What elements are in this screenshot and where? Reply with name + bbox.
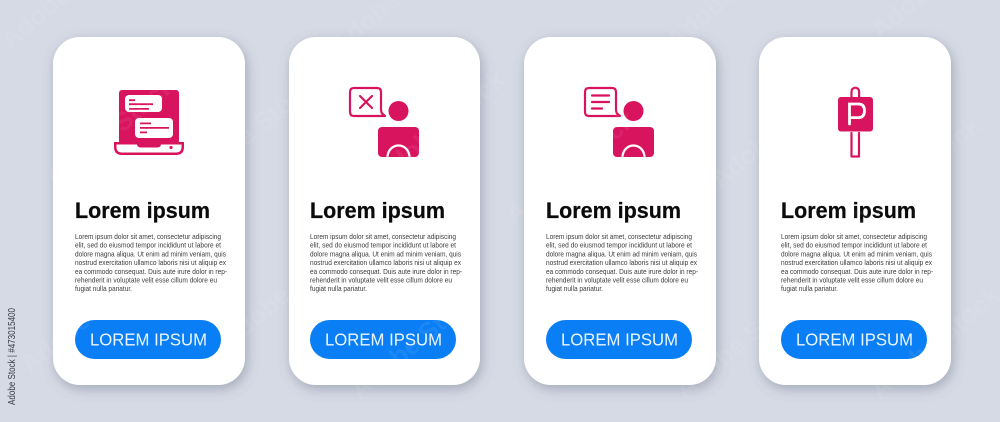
watermark: Adobe Stock (215, 229, 356, 355)
text block: rehenderit in voluptate velit esse cillum dolore eu (75, 276, 217, 284)
text block: fugiat nulla pariatur. (781, 284, 838, 293)
text block: nostrud exercitation ullamco laboris nisi ut aliquip ex (310, 258, 461, 267)
heading: Lorem ipsum (310, 198, 445, 223)
text block: ea commodo consequat. Duis aute irure dolor in rep- (781, 267, 934, 276)
watermark: Adobe Stock (345, 279, 486, 405)
text block (781, 232, 934, 293)
heading: Lorem ipsum (546, 198, 681, 223)
text block: Lorem ipsum dolor sit amet, consectetur adipiscing (781, 232, 927, 241)
button: LOREM IPSUM (561, 330, 678, 350)
watermark: Adobe Stock (15, 254, 156, 380)
watermark: Adobe Stock (370, 64, 511, 190)
text block (546, 232, 699, 293)
text block: Lorem ipsum dolor sit amet, consectetur adipiscing (75, 232, 221, 241)
text block: fugiat nulla pariatur. (310, 284, 367, 293)
text block: elit, sed do eiusmod tempor incididunt ut labore et (781, 241, 927, 250)
heading: Lorem ipsum (75, 198, 210, 223)
text block: dolore magna aliqua. Ut enim ad minim veniam, quis (310, 249, 461, 258)
text block: rehenderit in voluptate velit esse cillum dolore eu (310, 276, 452, 284)
button (310, 320, 456, 359)
text block: rehenderit in voluptate velit esse cillum dolore eu (546, 276, 688, 284)
button (781, 320, 927, 359)
panel: card 3 person with message (524, 37, 716, 385)
text block: elit, sed do eiusmod tempor incididunt ut labore et (75, 241, 221, 250)
text block (310, 232, 463, 293)
watermark: Adobe Stock (180, 69, 321, 195)
text block: Lorem ipsum dolor sit amet, consectetur adipiscing (310, 232, 456, 241)
button: LOREM IPSUM (796, 330, 913, 350)
stock id side label: Adobe Stock | #473015400 (6, 308, 18, 405)
text block: ea commodo consequat. Duis aute irure dolor in rep- (75, 267, 228, 276)
text block: dolore magna aliqua. Ut enim ad minim veniam, quis (75, 249, 226, 258)
heading: Lorem ipsum (781, 198, 916, 223)
text block: nostrud exercitation ullamco laboris nisi ut aliquip ex (75, 258, 226, 267)
text block: nostrud exercitation ullamco laboris nisi ut aliquip ex (781, 258, 932, 267)
text block: dolore magna aliqua. Ut enim ad minim veniam, quis (546, 249, 697, 258)
watermark: Adobe Stock (670, 279, 811, 405)
text block: Lorem ipsum dolor sit amet, consectetur adipiscing (546, 232, 692, 241)
text block: dolore magna aliqua. Ut enim ad minim veniam, quis (781, 249, 932, 258)
panel: card 1 laptop chat (53, 37, 245, 385)
icon: person with cross speech bubble (350, 88, 419, 157)
text block (75, 232, 228, 293)
text block: ea commodo consequat. Duis aute irure dolor in rep- (546, 267, 699, 276)
icon: person with text speech bubble (585, 88, 654, 157)
text block: elit, sed do eiusmod tempor incididunt ut labore et (310, 241, 456, 250)
text block: ea commodo consequat. Duis aute irure dolor in rep- (310, 267, 463, 276)
icon: parking sign (838, 88, 873, 156)
button (75, 320, 221, 359)
text block: fugiat nulla pariatur. (546, 284, 603, 293)
panel: card 2 person rejected message (289, 37, 480, 385)
button (546, 320, 692, 359)
panel: card 4 parking sign (759, 37, 951, 385)
button: LOREM IPSUM (90, 330, 207, 350)
text block: elit, sed do eiusmod tempor incididunt ut labore et (546, 241, 692, 250)
watermark: Adobe Stock (705, 69, 846, 195)
button: LOREM IPSUM (325, 330, 442, 350)
text block: nostrud exercitation ullamco laboris nisi ut aliquip ex (546, 258, 697, 267)
text block: fugiat nulla pariatur. (75, 284, 132, 293)
watermark: Adobe Stock (845, 109, 986, 235)
text block: rehenderit in voluptate velit esse cillum dolore eu (781, 276, 923, 284)
icon: laptop with chat bubbles (114, 90, 184, 155)
watermark: Adobe Stock (40, 69, 181, 195)
watermark: Adobe Stock (500, 104, 641, 230)
